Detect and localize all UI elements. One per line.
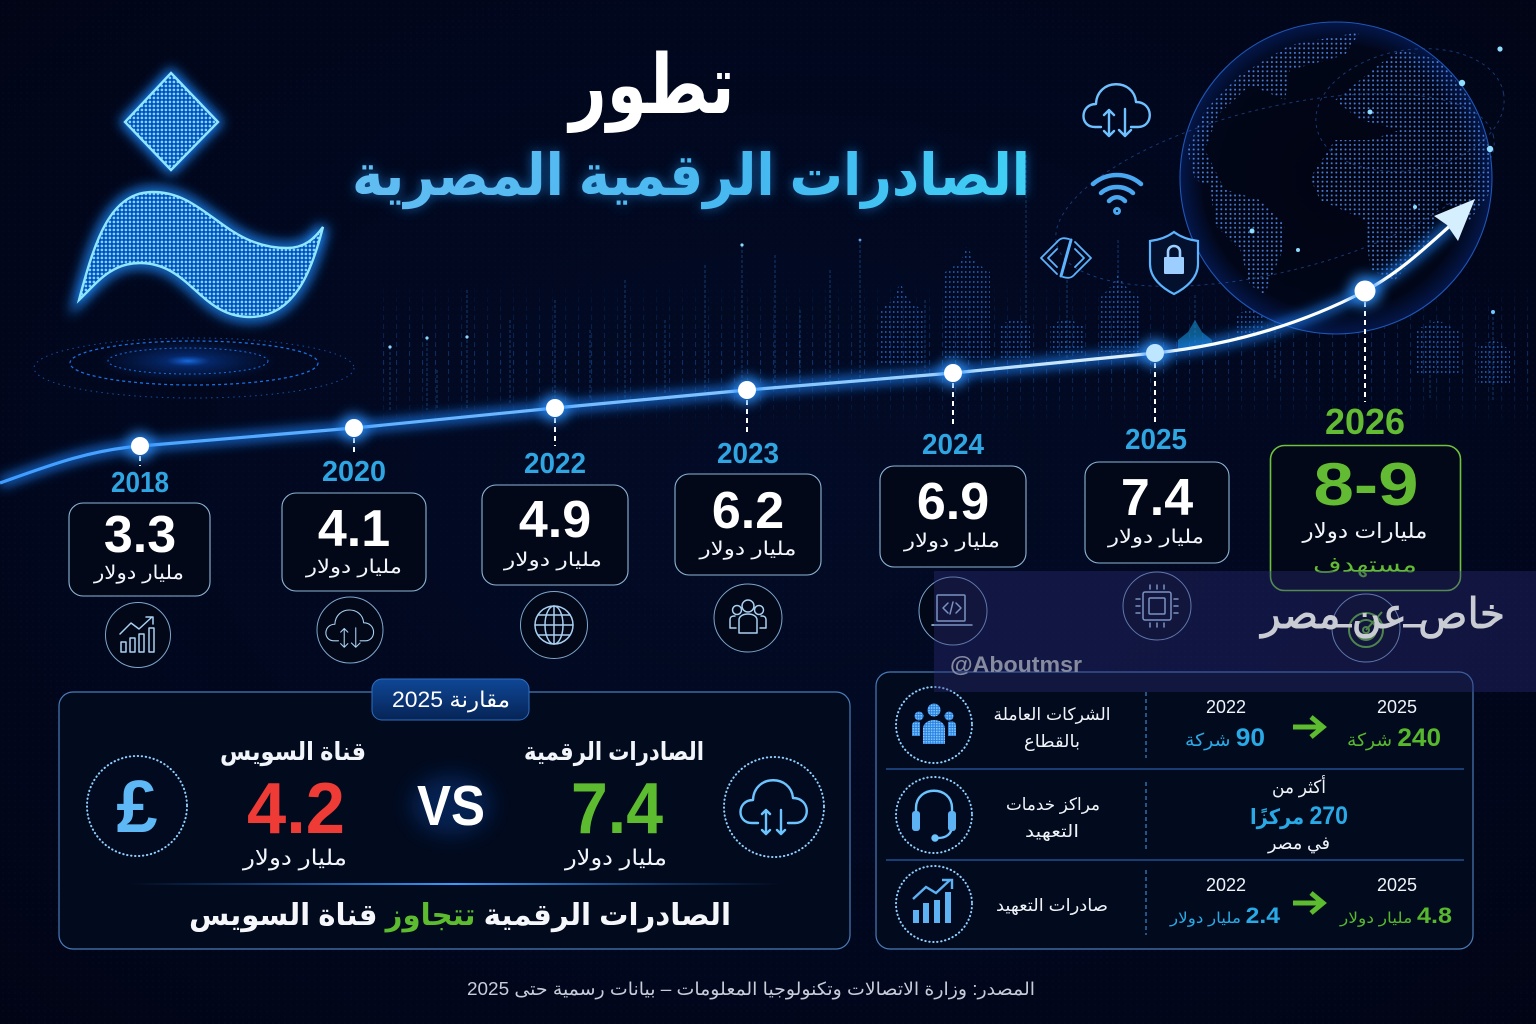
milestone 2025 — [1085, 424, 1229, 640]
row: outsourcing centres — [896, 775, 1348, 854]
milestone 2026 target: 2026 — [1325, 401, 1405, 442]
row: outsourcing exports — [896, 866, 1452, 942]
suez column — [220, 738, 366, 870]
milestone 2020: 4.1 — [318, 500, 390, 558]
milestone 2025: 7.4 — [1121, 469, 1193, 527]
title — [352, 40, 1030, 210]
row: outsourcing centres: 270 مركزًا — [1250, 802, 1348, 830]
milestone 2026 target: مستهدف — [1313, 552, 1417, 577]
milestone 2024: 2024 — [922, 429, 984, 461]
panel: comparison 2025 — [59, 679, 850, 949]
globe light points — [1250, 46, 1503, 252]
milestone 2026 target: 8-9 — [1314, 451, 1418, 518]
VS label: VS — [417, 774, 485, 838]
logo wave — [79, 192, 323, 317]
milestone 2024 — [880, 429, 1026, 645]
row: companies: 2022 — [1206, 697, 1246, 717]
row: companies: 90 شركة — [1185, 724, 1265, 752]
arrow head — [1434, 199, 1475, 241]
logo diamond — [125, 73, 218, 170]
row: outsourcing centres: في مصر — [1267, 833, 1330, 854]
digital column: مليار دولار — [564, 845, 667, 870]
icon: wifi — [1093, 175, 1141, 214]
milestone 2023: 2023 — [717, 438, 779, 470]
title line 1: تطور — [566, 40, 734, 133]
milestone 2026 target — [1270, 401, 1460, 662]
digital column: الصادرات الرقمية — [524, 738, 704, 767]
milestone 2024: مليار دولار — [903, 531, 1000, 552]
milestone 2018: 3.3 — [104, 506, 176, 564]
comparison conclusion: الصادرات الرقمية تتجاوز قناة السويس — [189, 899, 731, 933]
suez column: 4.2 — [247, 769, 345, 849]
logo base rings — [34, 338, 354, 398]
data light lines — [388, 155, 1495, 410]
row: outsourcing centres: أكثر من — [1272, 775, 1326, 798]
milestone 2023 — [675, 438, 821, 652]
milestone 2022: مليار دولار — [503, 550, 602, 571]
logo glyph — [34, 73, 354, 398]
arrow — [1293, 893, 1323, 913]
milestone 2023: 6.2 — [712, 482, 784, 540]
row: outsourcing centres: التعهيد — [1025, 822, 1079, 842]
timeline nodes — [126, 275, 1381, 460]
milestone 2024: 6.9 — [917, 473, 989, 531]
watermark overlay: @Aboutmsr — [950, 652, 1082, 677]
milestone 2020: 2020 — [322, 456, 386, 488]
row: outsourcing exports: 2025 — [1377, 875, 1417, 895]
title line 2 glow: الصادرات الرقمية المصرية — [352, 143, 1030, 210]
milestone 2025: 2025 — [1125, 424, 1187, 456]
milestone 2022: 2022 — [524, 448, 586, 480]
milestone 2018: مليار دولار — [93, 563, 184, 584]
icon: pound: £ — [116, 765, 158, 848]
growth curve — [0, 199, 1475, 483]
milestone 2025: مليار دولار — [1107, 527, 1204, 548]
row: companies: الشركات العاملة — [994, 705, 1110, 724]
city skyline — [880, 246, 1510, 385]
icon: cloud — [724, 757, 824, 857]
icon: pound — [87, 756, 187, 856]
watermark overlay: خاص عن مصر — [1259, 590, 1505, 638]
digital column: 7.4 — [571, 769, 663, 849]
row: outsourcing centres: مراكز خدمات — [1006, 795, 1100, 814]
panel: sector indicators — [876, 672, 1473, 949]
milestone 2020: مليار دولار — [305, 557, 402, 578]
globe — [1037, 22, 1514, 334]
icon: cloud — [1083, 84, 1150, 136]
digital column — [524, 738, 704, 870]
watermark overlay — [934, 571, 1536, 692]
milestone 2023: مليار دولار — [698, 539, 796, 560]
row: companies: 240 شركة — [1347, 724, 1441, 752]
suez column: مليار دولار — [242, 845, 347, 870]
watermark connecting strokes — [1336, 624, 1421, 628]
comparison tab — [372, 679, 529, 720]
title line 2: الصادرات الرقمية المصرية — [352, 143, 1030, 210]
row: outsourcing exports: 4.8 مليار دولار — [1339, 903, 1452, 928]
source footer: المصدر: وزارة الاتصالات وتكنولوجيا المعلومات – بيانات رسمية حتى 2025 — [467, 979, 1035, 1000]
row: companies: بالقطاع — [1024, 732, 1080, 752]
arrow — [1293, 717, 1323, 737]
milestone 2018 — [69, 467, 210, 668]
row: companies: 2025 — [1377, 697, 1417, 717]
icon: code — [1041, 238, 1091, 278]
row: outsourcing exports: 2.4 مليار دولار — [1169, 903, 1281, 928]
globe orbits — [1037, 34, 1514, 324]
comparison tab: مقارنة 2025 — [392, 687, 510, 712]
milestone 2022 — [482, 448, 628, 658]
row: companies — [896, 687, 1441, 763]
row: outsourcing exports: صادرات التعهيد — [996, 896, 1108, 916]
row: outsourcing exports: 2022 — [1206, 875, 1246, 895]
milestone 2020 — [282, 456, 426, 663]
icon: shield lock — [1150, 232, 1198, 294]
milestone 2022: 4.9 — [519, 491, 591, 549]
connector dashes — [140, 302, 1365, 466]
suez column: قناة السويس — [220, 738, 366, 767]
milestone 2026 target: مليارات دولار — [1301, 520, 1428, 543]
milestone 2018: 2018 — [111, 467, 169, 499]
